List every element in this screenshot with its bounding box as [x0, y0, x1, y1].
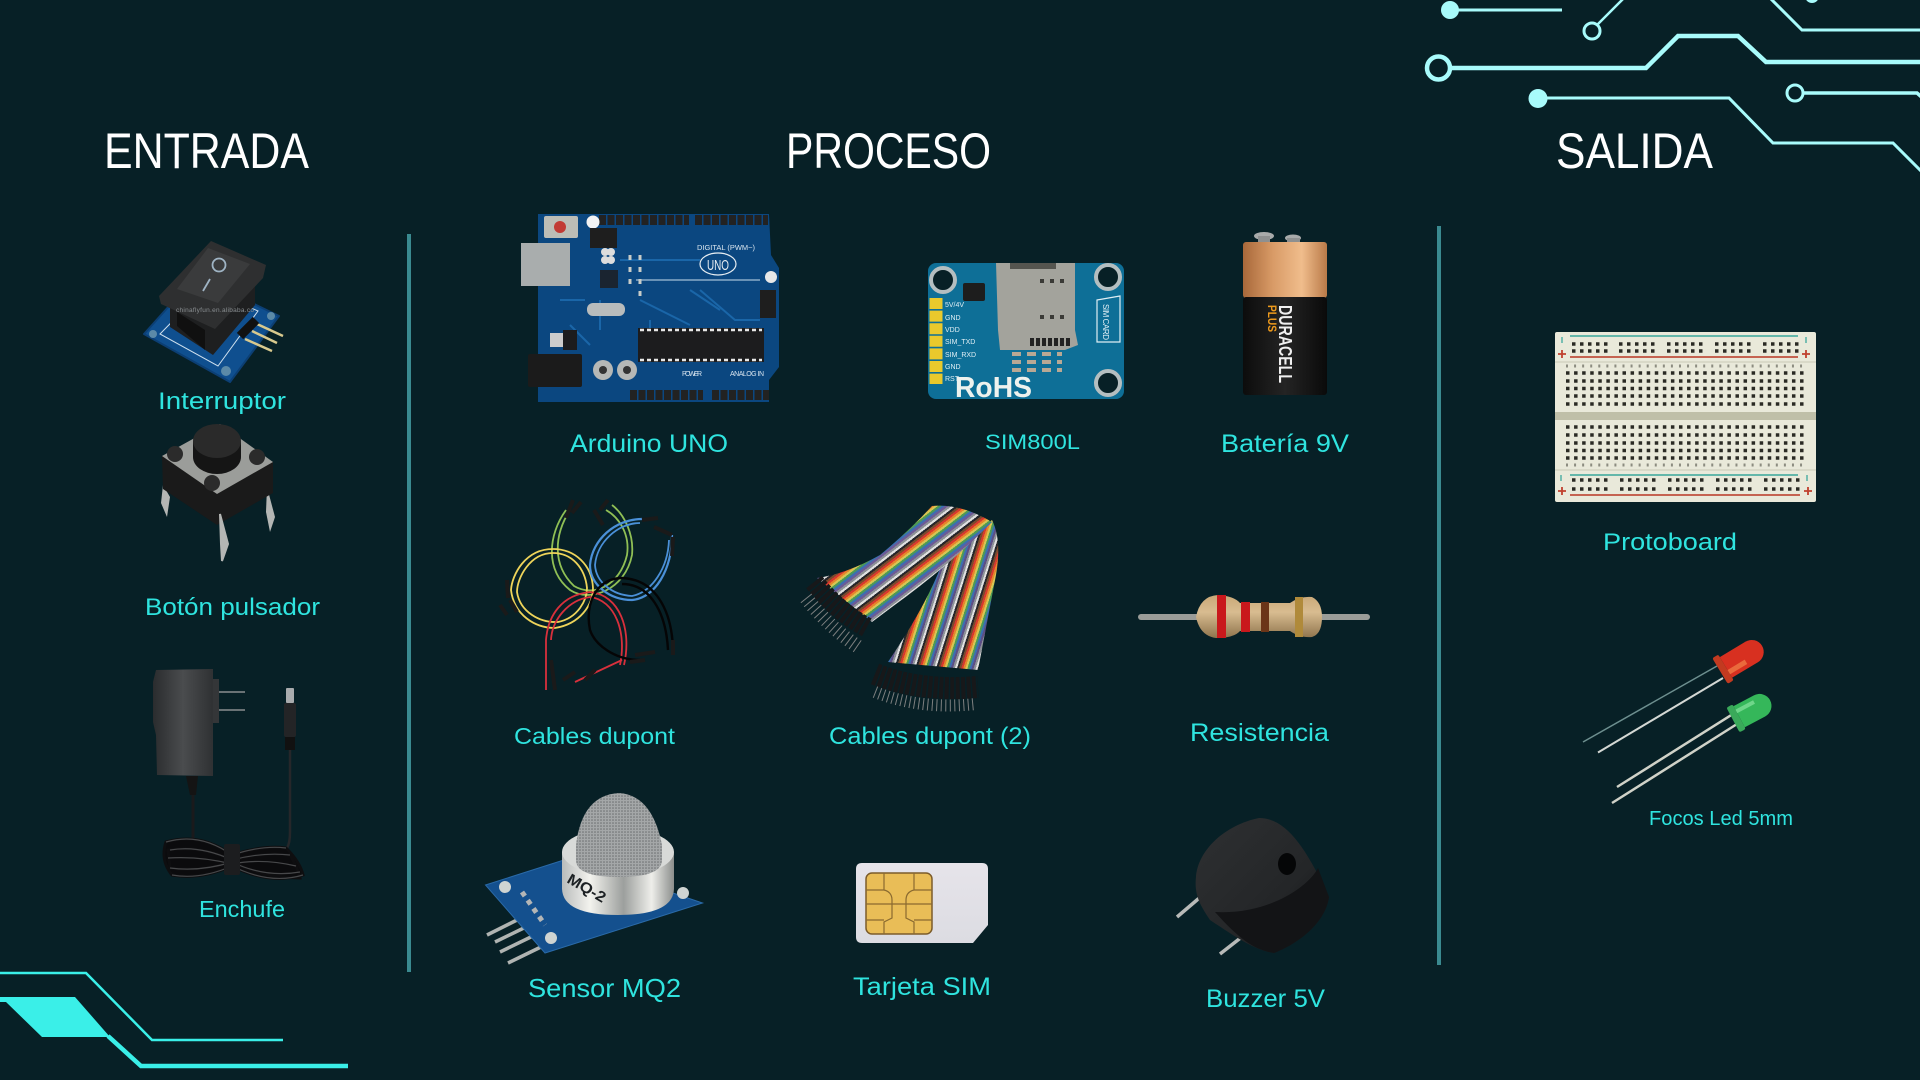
- icon: SIM800L module: SIM CARD: [1101, 304, 1110, 340]
- icon: SIM800L module: VDD: [945, 327, 960, 334]
- icon: push button: [161, 424, 275, 561]
- icon: 9V battery: PLUS: [1265, 305, 1279, 332]
- icon: buzzer: [1177, 818, 1329, 954]
- icon: red and green LEDs: [1583, 633, 1777, 803]
- label: Cables dupont (2): Cables dupont (2): [829, 723, 1031, 750]
- divider: entrada / proceso: [407, 234, 411, 972]
- label: Cables dupont: Cables dupont: [514, 723, 676, 749]
- icon: rocker switch module: [144, 241, 283, 382]
- icon: MQ2 gas sensor: MQ-2: [564, 871, 609, 906]
- icon: power adapter: [153, 669, 303, 878]
- label: Interruptor: Interruptor: [158, 388, 286, 415]
- label: SIM800L: SIM800L: [985, 431, 1080, 454]
- panel: salida: [1555, 123, 1816, 830]
- icon: Arduino UNO board: DIGITAL (PWM~): [697, 245, 755, 252]
- icon: Arduino UNO board: UNO: [707, 257, 729, 274]
- icon: Arduino UNO board: ANALOG IN: [730, 371, 764, 378]
- icon: resistor: [1141, 595, 1367, 638]
- icon: 9V battery: DURACELL: [1275, 305, 1295, 383]
- icon: SIM800L module: GND: [945, 364, 961, 371]
- icon: 9V battery: [1243, 232, 1327, 395]
- panel: entrada: [104, 123, 320, 922]
- label: Enchufe: Enchufe: [199, 896, 285, 922]
- icon: SIM800L module: SIM_RXD: [945, 352, 976, 359]
- icon: SIM800L module: SIM_TXD: [945, 339, 975, 346]
- icon: rainbow ribbon cable: [806, 506, 998, 706]
- label: Protoboard: Protoboard: [1603, 529, 1737, 556]
- label: Batería 9V: Batería 9V: [1221, 430, 1349, 458]
- label: Tarjeta SIM: Tarjeta SIM: [853, 973, 991, 1001]
- label: Buzzer 5V: Buzzer 5V: [1206, 985, 1325, 1013]
- icon: SIM800L module: RST: [945, 376, 960, 383]
- label: Resistencia: Resistencia: [1190, 719, 1329, 747]
- heading: PROCESO: PROCESO: [786, 123, 991, 179]
- label: Botón pulsador: Botón pulsador: [145, 594, 320, 621]
- icon: rocker switch module: chinaflyfun.en.alibaba.co: [176, 307, 254, 314]
- heading: ENTRADA: ENTRADA: [104, 123, 310, 179]
- icon: SIM card: [856, 863, 988, 943]
- icon: SIM800L module: GND: [945, 315, 961, 322]
- label: Focos Led 5mm: Focos Led 5mm: [1649, 808, 1793, 830]
- panel: proceso: [486, 123, 1367, 1013]
- icon: SIM800L module: RoHS: [955, 372, 1032, 404]
- icon: MQ2 gas sensor: [486, 793, 702, 963]
- icon: Arduino UNO board: POWER: [682, 371, 702, 378]
- decoration: circuit traces bottom left: [0, 973, 348, 1066]
- divider: proceso / salida: [1437, 226, 1441, 965]
- label: Arduino UNO: Arduino UNO: [570, 430, 728, 458]
- icon: protoboard: [1555, 332, 1816, 502]
- decoration: circuit traces top right: [1427, 0, 1920, 175]
- heading: SALIDA: SALIDA: [1556, 123, 1714, 179]
- label: Sensor MQ2: Sensor MQ2: [528, 973, 681, 1003]
- icon: Arduino UNO board: [521, 214, 779, 402]
- icon: SIM800L module: 5V/4V: [945, 302, 964, 309]
- icon: dupont jumper wires: [500, 500, 673, 690]
- icon: SIM800L module: [928, 263, 1124, 404]
